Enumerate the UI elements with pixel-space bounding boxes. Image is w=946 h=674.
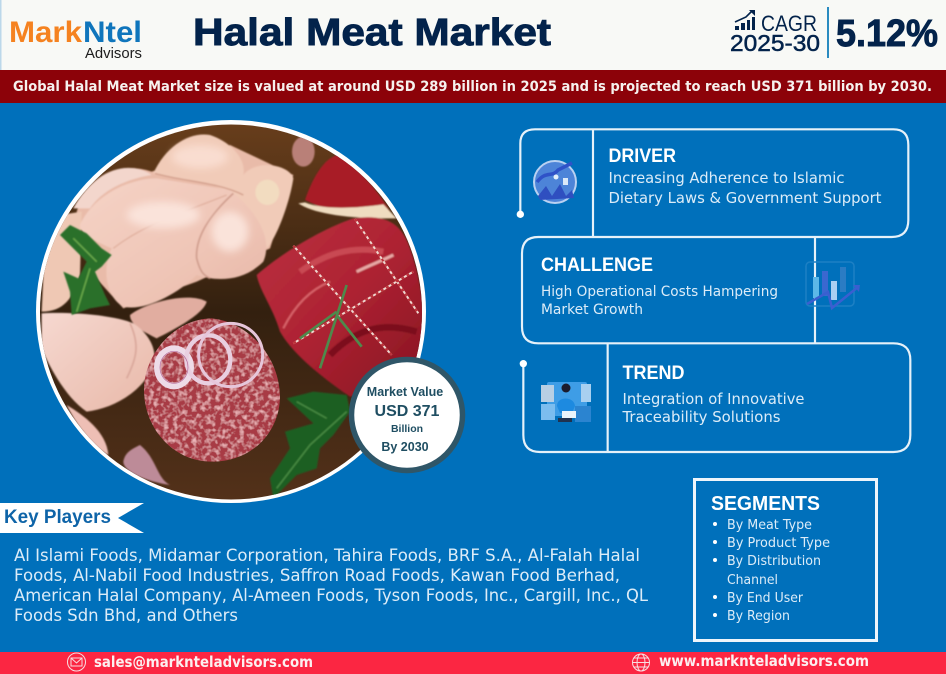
footer bar: sales@marknteladvisors.com xyxy=(94,653,313,671)
segments box: SEGMENTS xyxy=(711,493,820,515)
key players list: American Halal Company, Al-Ameen Foods, Tyson Foods, Inc., Cargill, Inc., QL xyxy=(14,586,649,605)
summary banner xyxy=(0,70,946,103)
icon: declining bar chart xyxy=(806,262,860,308)
footer bar: www.marknteladvisors.com xyxy=(659,652,869,670)
card frame: driver, challenge, trend xyxy=(517,129,910,452)
market value badge: USD 371 xyxy=(375,403,440,420)
left parsley xyxy=(60,225,112,315)
CAGR block xyxy=(730,7,938,58)
panel: driver: Increasing Adherence to Islamic xyxy=(608,169,844,187)
panel: driver: DRIVER xyxy=(608,146,676,167)
segment list: By Meat Type xyxy=(727,517,812,533)
segment list: By Product Type xyxy=(727,535,830,551)
key players ribbon: Key Players xyxy=(4,507,111,528)
CAGR block: CAGR xyxy=(761,11,817,36)
market value badge: Billion xyxy=(391,423,423,435)
key players list: Foods, Al-Nabil Food Industries, Saffron Road Foods, Kawan Food Berhad, xyxy=(14,566,620,585)
logo: MarkNtel Advisors xyxy=(9,16,142,62)
logo: MarkNtel Advisors: Ntel xyxy=(83,16,142,49)
segment list: By Distribution xyxy=(727,553,821,569)
mince patty xyxy=(144,318,280,462)
photo: assorted raw halal meat xyxy=(36,120,426,503)
key players list: Al Islami Foods, Midamar Corporation, Tahira Foods, BRF S.A., Al-Falah Halal xyxy=(14,546,640,565)
market value badge: Market Value xyxy=(367,385,443,399)
garlic xyxy=(123,445,170,485)
footer bar xyxy=(0,652,946,674)
panel: trend: Integration of Innovative xyxy=(622,390,804,408)
key players list xyxy=(14,546,649,625)
panel: trend xyxy=(541,363,804,426)
market value badge xyxy=(352,360,462,470)
panel: challenge: Market Growth xyxy=(541,302,643,318)
segments box xyxy=(694,480,876,640)
steak top right xyxy=(305,155,390,212)
header band xyxy=(0,0,946,70)
segment list xyxy=(713,517,830,624)
top garlic xyxy=(292,137,315,167)
panel: trend: Traceability Solutions xyxy=(622,408,781,426)
market value badge: By 2030 xyxy=(381,440,429,454)
onions and twine xyxy=(157,219,418,387)
CAGR block: 2025-30 xyxy=(730,30,820,56)
panel: driver xyxy=(534,146,882,207)
logo: MarkNtel Advisors: Mark xyxy=(9,16,82,49)
title: Halal Meat Market xyxy=(193,12,551,54)
key players ribbon xyxy=(0,503,144,533)
panel: challenge: High Operational Costs Hampering xyxy=(541,284,778,300)
icon: growth bars xyxy=(735,10,755,30)
panel: trend: TREND xyxy=(622,363,684,384)
segment list: By End User xyxy=(727,590,803,606)
segment list: By Region xyxy=(727,608,790,624)
right parsley xyxy=(270,392,350,498)
segment list: Channel xyxy=(727,572,778,588)
icon: globe xyxy=(632,654,650,671)
beef roast xyxy=(257,217,424,397)
icon: analyst with dashboards xyxy=(541,382,591,422)
icon: email xyxy=(68,653,86,671)
panel: challenge: CHALLENGE xyxy=(541,255,653,276)
panel: challenge xyxy=(541,255,860,318)
CAGR block: 5.12% xyxy=(836,13,938,55)
key players list: Foods Sdn Bhd, and Others xyxy=(14,606,238,625)
chicken filler and parts xyxy=(77,145,293,308)
bottom left chicken xyxy=(42,313,155,412)
panel: driver: Dietary Laws & Government Support xyxy=(608,189,882,207)
logo: MarkNtel Advisors: Advisors xyxy=(85,45,142,62)
icon: globe with rising arrow xyxy=(534,161,576,203)
